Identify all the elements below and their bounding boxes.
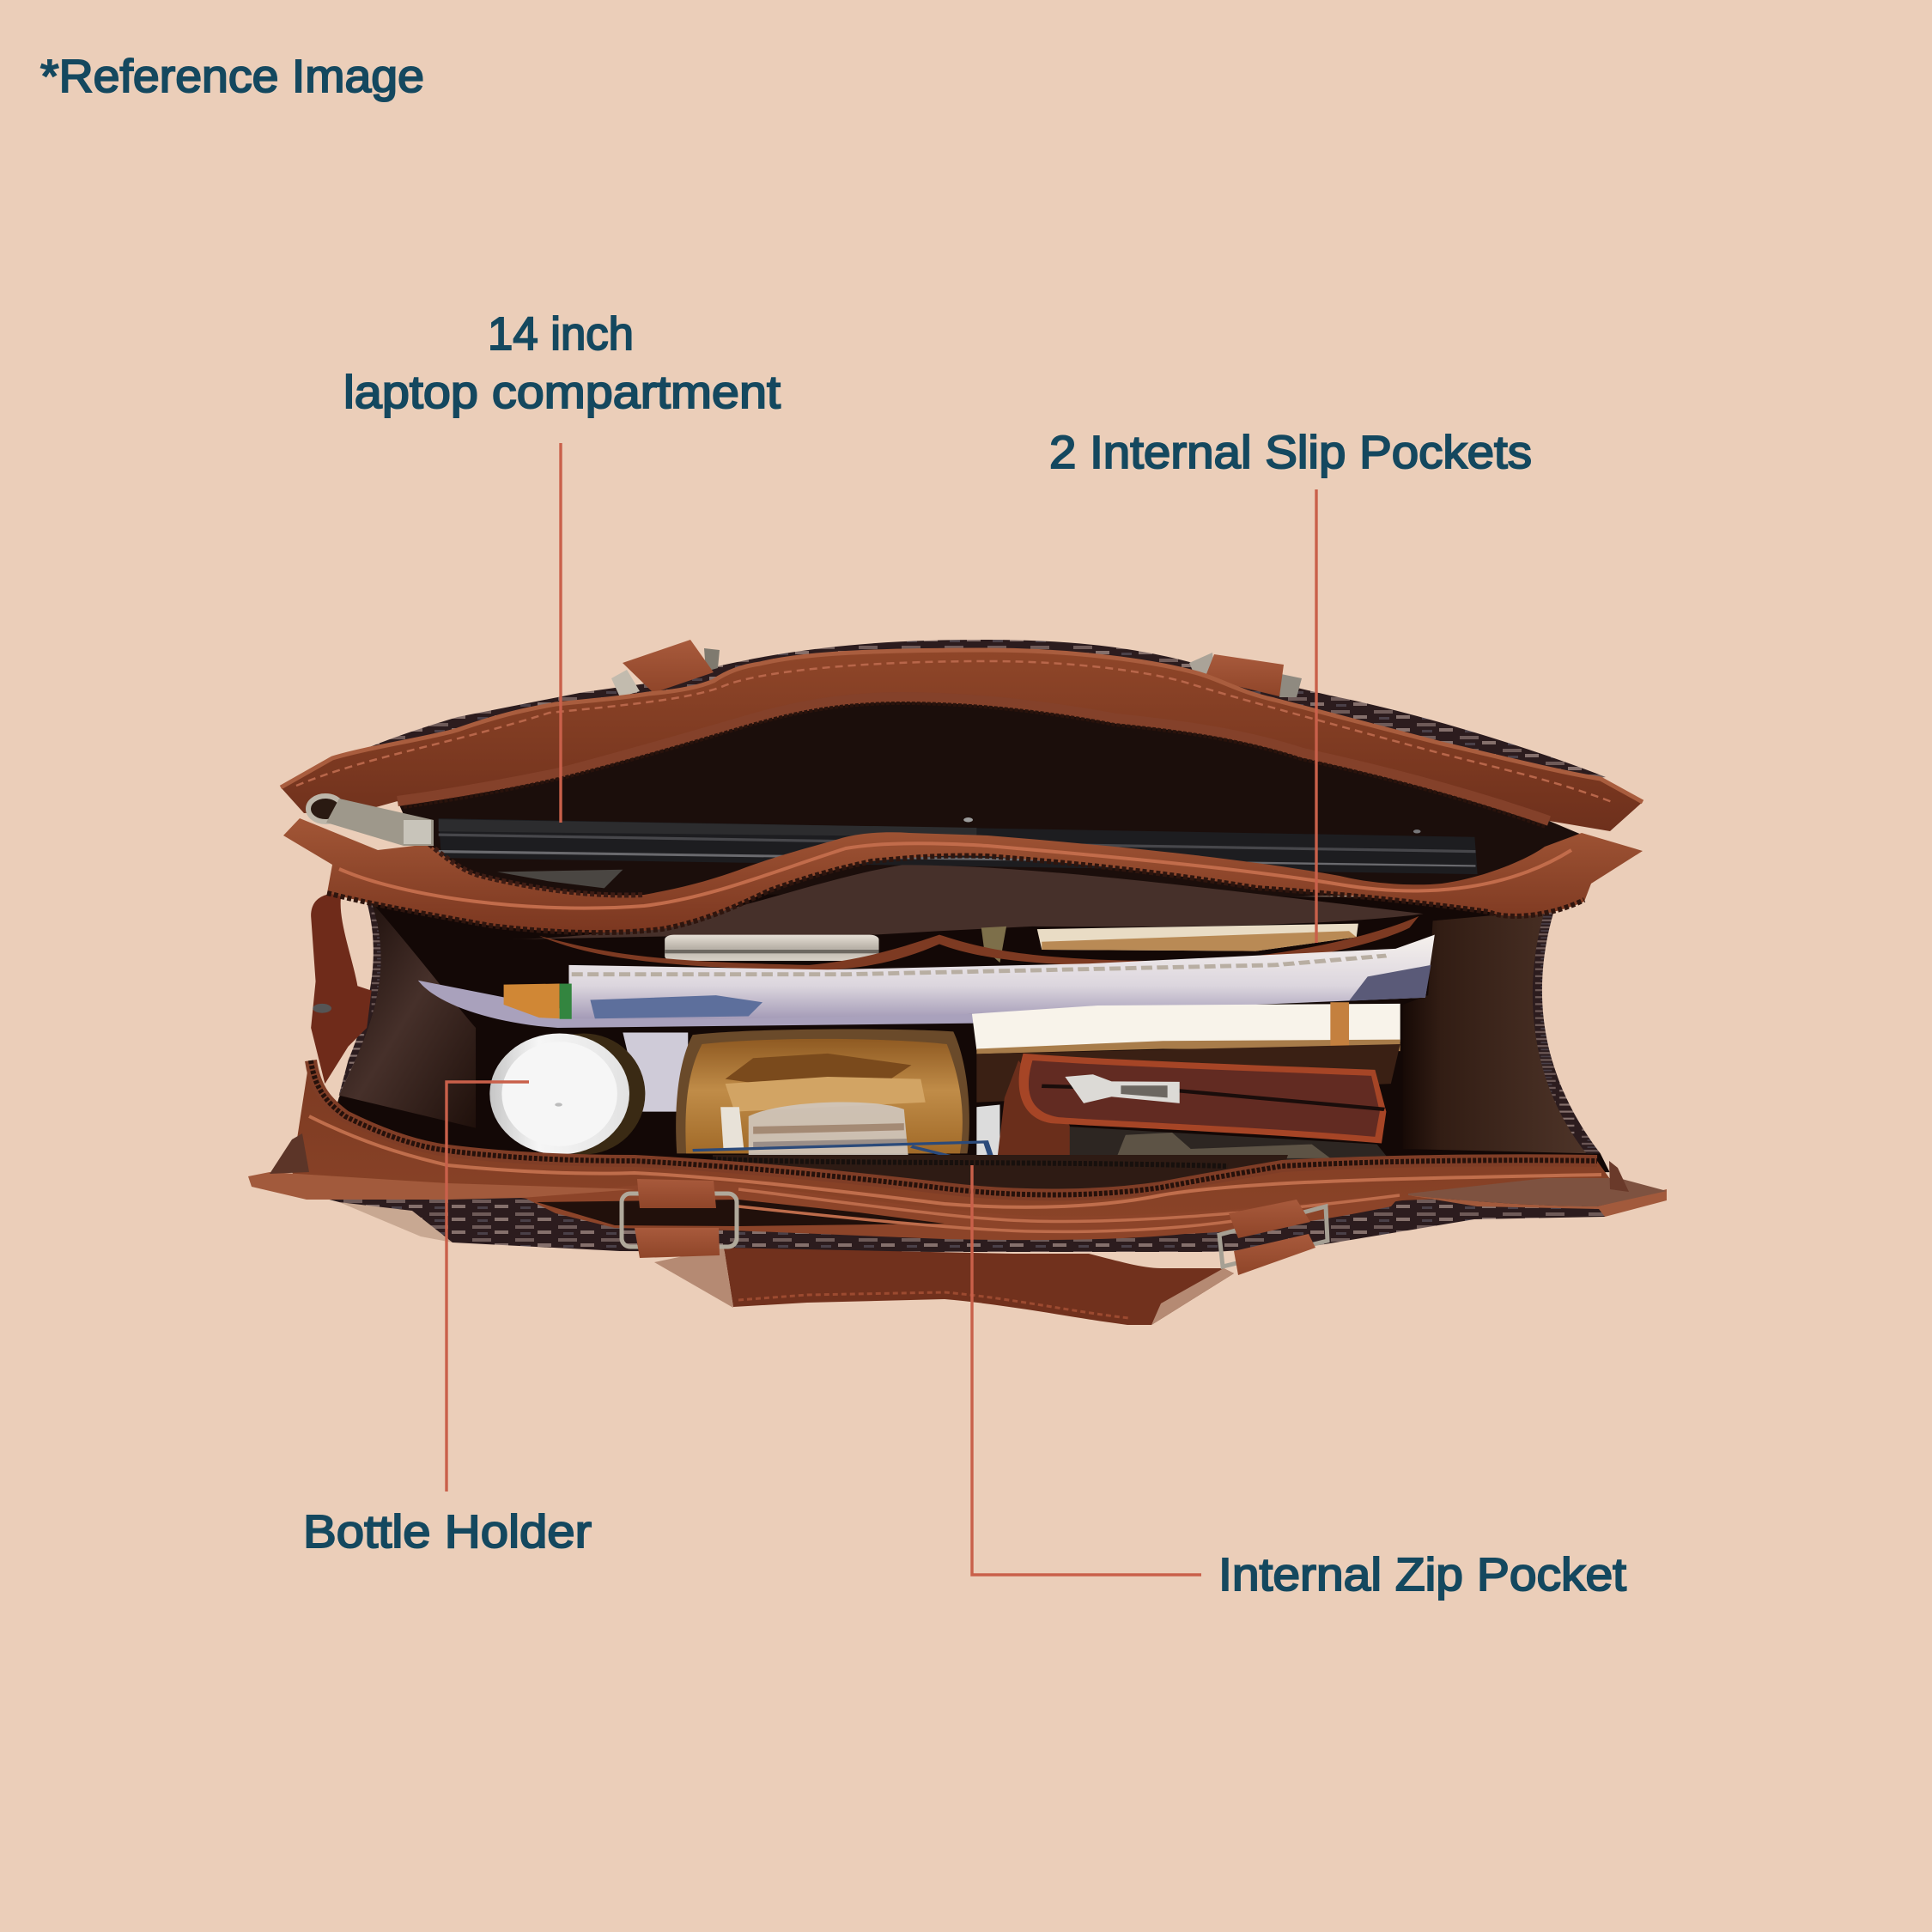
food container bbox=[676, 1029, 969, 1153]
left side gusset bbox=[270, 1133, 309, 1174]
front carry tab right bbox=[1219, 1200, 1327, 1275]
pencil bbox=[504, 984, 572, 1019]
front laptop pocket lip bbox=[283, 796, 1643, 933]
lip highlight lines bbox=[738, 1189, 1400, 1231]
upper inner zip bbox=[429, 844, 644, 896]
pattern on paper bbox=[590, 995, 762, 1018]
flap rim highlight bbox=[281, 650, 1643, 802]
label: 2 internal slip pockets: 2 Internal Slip Pockets bbox=[1049, 427, 1532, 478]
photo: open bag interior bbox=[281, 640, 1643, 910]
side tweed edge right bbox=[1533, 912, 1601, 1153]
note: reference image: *Reference Image bbox=[40, 51, 424, 102]
front section of bag bbox=[248, 1060, 1667, 1325]
back zip bbox=[398, 697, 1549, 821]
lip body bbox=[283, 818, 1643, 933]
pen bbox=[693, 1142, 991, 1158]
label: bottle holder: Bottle Holder bbox=[303, 1506, 592, 1558]
pouch zipper pull bbox=[1065, 1074, 1180, 1103]
zip puller bbox=[308, 796, 434, 846]
right side gusset bbox=[1609, 1161, 1629, 1192]
pocket lining bbox=[398, 697, 1582, 910]
pale print on pouch bbox=[1116, 1133, 1330, 1158]
pale side panel bbox=[339, 1202, 453, 1242]
wall highlight bbox=[309, 1116, 1601, 1207]
front zip band bbox=[311, 1060, 1597, 1194]
bottle strap left bbox=[311, 893, 372, 1084]
notebook in slip pocket bbox=[1037, 924, 1358, 951]
navy paper end bbox=[1349, 965, 1431, 1001]
papers stack bbox=[568, 935, 1435, 1019]
white book bbox=[972, 1002, 1400, 1103]
lower lip bundle bbox=[521, 1181, 1402, 1240]
label: 14 inch laptop compartment: laptop compartment bbox=[343, 367, 781, 418]
main interior bbox=[316, 893, 1610, 1177]
small clear container bbox=[749, 1102, 908, 1161]
top back flap bbox=[281, 650, 1643, 831]
front carry tab left bbox=[622, 1179, 737, 1258]
torn paper top edge bbox=[572, 956, 1386, 975]
black pattern pouch base bbox=[1051, 1126, 1395, 1168]
lower zipper dark band bbox=[537, 1200, 945, 1226]
front tweed panel bbox=[307, 1194, 1614, 1252]
handle pale left bbox=[654, 1248, 733, 1308]
lip zipper bbox=[327, 856, 1584, 933]
leader: laptop compartment bbox=[559, 443, 562, 823]
bag contents bbox=[311, 817, 1610, 1177]
white card behind jar bbox=[623, 1032, 688, 1112]
laptop bbox=[439, 817, 1478, 874]
middle pocket fabric bbox=[511, 865, 1424, 939]
small key item bbox=[497, 870, 623, 888]
back tweed panel bbox=[339, 640, 1606, 824]
handle stitching bbox=[738, 1292, 1129, 1318]
leader: internal zip pocket bbox=[972, 1165, 1201, 1575]
pouch side bbox=[997, 1060, 1070, 1161]
papers purple sheet bbox=[418, 981, 976, 1028]
label: 14 inch laptop compartment bbox=[343, 308, 781, 418]
back carry tab right bbox=[1189, 653, 1302, 697]
back carry tab left bbox=[611, 640, 720, 697]
label: internal zip pocket: Internal Zip Pocket bbox=[1218, 1549, 1626, 1601]
right side wall bbox=[1403, 910, 1593, 1153]
leader: slip pockets bbox=[1315, 489, 1318, 943]
slip pocket lip bbox=[539, 916, 1419, 970]
jar with white lid bbox=[489, 1034, 645, 1154]
lip highlight bbox=[339, 843, 1571, 908]
right flap edge bbox=[1408, 1189, 1667, 1217]
front handle bbox=[724, 1248, 1234, 1325]
right flap inner bbox=[1408, 1178, 1667, 1206]
back zip teeth bbox=[404, 703, 1546, 827]
leader: bottle holder bbox=[447, 1082, 529, 1492]
left flap edge bbox=[248, 1172, 635, 1200]
phone in slip pocket bbox=[665, 935, 879, 961]
dark middle pocket opening bbox=[713, 1155, 1288, 1198]
front wall leather bbox=[292, 1060, 1619, 1234]
flap stitching bbox=[296, 661, 1614, 803]
label: 14 inch laptop compartment: 14 inch bbox=[488, 308, 634, 360]
red pouch bbox=[1019, 1054, 1386, 1143]
side tweed edge left bbox=[339, 902, 381, 1096]
front zip teeth bbox=[311, 1060, 1597, 1194]
left side wall bbox=[339, 902, 476, 1128]
key charm bbox=[981, 927, 1006, 963]
handle pale right bbox=[1151, 1268, 1234, 1325]
second zip line bbox=[713, 1159, 1228, 1166]
plastic bottle cap bbox=[976, 1104, 999, 1161]
